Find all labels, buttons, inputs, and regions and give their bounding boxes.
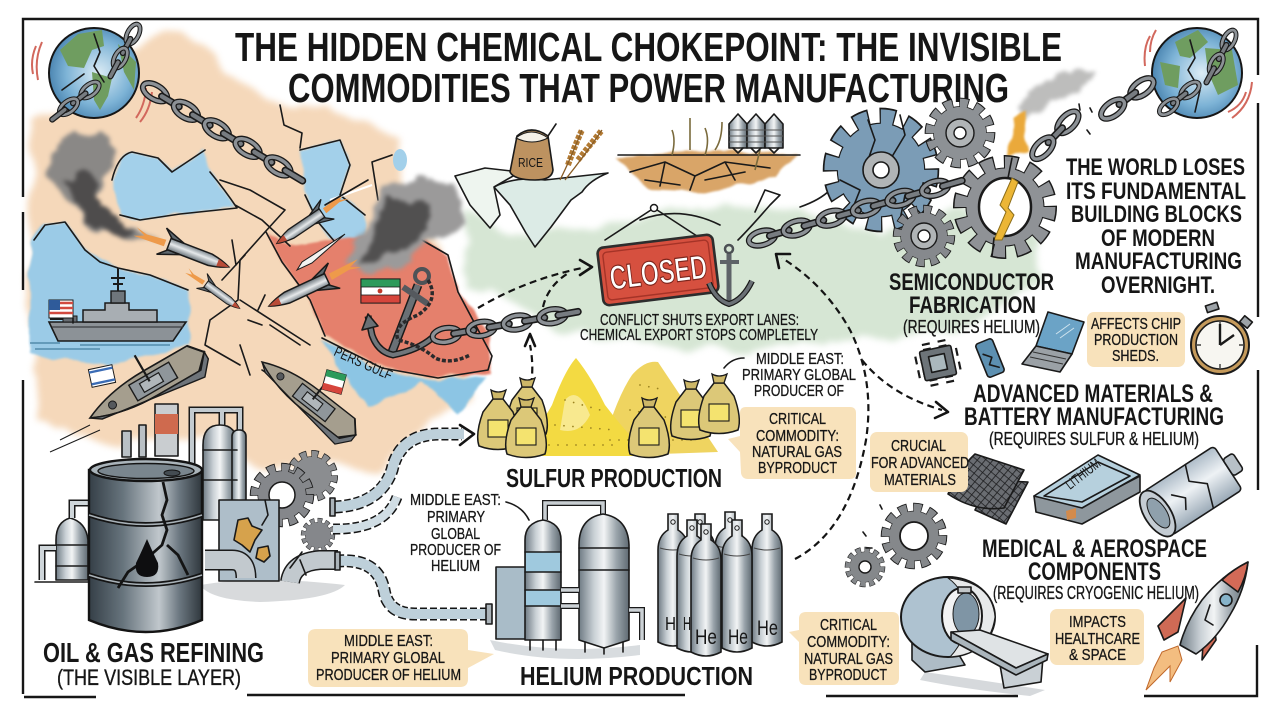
icon: broken gears [255, 454, 334, 550]
callout: primary global producer of helium [308, 629, 494, 687]
callout: helium critical commodity: BYPRODUCT [809, 667, 887, 684]
text: world loses statement: OF MODERN [1101, 225, 1215, 252]
callout: crucial for advanced materials: CRUCIAL [891, 438, 946, 455]
callout: crucial for advanced materials: MATERIALS [884, 472, 956, 489]
icon: sulfur piles [515, 358, 718, 456]
callout: crucial for advanced materials [870, 432, 969, 492]
map: India outline [494, 173, 608, 247]
icon: MRI scanner [901, 577, 1048, 696]
title: THE HIDDEN CHEMICAL CHOKEPOINT: THE INVISIBLE [235, 24, 1062, 70]
icon: rocket [1146, 562, 1248, 690]
callout: sulfur critical commodity [728, 407, 856, 479]
heading: advanced materials: (REQUIRES SULFUR & HELIUM) [989, 429, 1199, 449]
callout: crucial for advanced materials: FOR ADVANCED [871, 455, 969, 472]
note: sulfur producer: PRIMARY GLOBAL [742, 367, 856, 384]
chain: broken chain from right globe [1028, 74, 1157, 163]
heading: semiconductor fabrication: (REQUIRES HELIUM) [903, 317, 1040, 337]
heading: medical and aerospace: MEDICAL & AEROSPACE [982, 535, 1207, 563]
icon: small lower gear [898, 210, 950, 262]
callout: affects chip production: SHEDS. [1112, 348, 1159, 365]
panel: semiconductor fabrication [889, 269, 1252, 389]
callout: impacts healthcare and space: IMPACTS [1069, 614, 1126, 631]
icon: big cracked gear [961, 158, 1049, 256]
icon: Iranian warship [250, 339, 373, 451]
title: COMMODITIES THAT POWER MANUFACTURING [288, 65, 1009, 111]
chain: from left globe to map [140, 79, 309, 188]
icon: closed sign with anchor: CLOSED [607, 248, 709, 298]
callout: primary global producer of helium: PRODUCER OF HELIUM [316, 667, 461, 684]
icon: lithium battery [1034, 455, 1140, 524]
callout: sulfur critical commodity: BYPRODUCT [758, 460, 837, 477]
icon: cracked phone [975, 338, 1005, 378]
icon: small upper gear [930, 103, 990, 163]
callout: helium critical commodity: NATURAL GAS [804, 651, 893, 668]
panel: helium production [308, 492, 899, 691]
icon: microchip [912, 337, 964, 389]
smoke: Iran plume [344, 176, 462, 272]
icon: sulfur bags [478, 374, 739, 458]
icon: cracked oil barrel [89, 459, 202, 632]
icon: parched land with silos [615, 114, 800, 192]
icon: helium cylinders [658, 512, 782, 656]
heading: medical and aerospace: COMPONENTS [1028, 558, 1161, 586]
pipes: refinery to sulfur and helium [330, 425, 492, 624]
map: peach land [30, 32, 470, 468]
label: Persian Gulf: PERS GULF [332, 343, 395, 383]
map: west Asia outline [455, 168, 520, 228]
heading: medical and aerospace [982, 535, 1207, 603]
callout: sulfur critical commodity: CRITICAL [769, 411, 826, 428]
callout: primary global producer of helium: PRIMARY GLOBAL [331, 650, 445, 667]
arrows: dashed flows [478, 254, 948, 559]
note: helium producer: PRODUCER OF [410, 542, 501, 559]
icon: lithium battery: LITHIUM [1062, 455, 1103, 492]
callout: impacts healthcare and space [1050, 609, 1144, 665]
heading: oil and gas refining: (THE VISIBLE LAYER) [57, 665, 241, 690]
icon: anchor and chain [362, 269, 470, 361]
map: pale green Asia [462, 205, 1045, 350]
icon: helium cylinders: He [728, 626, 748, 649]
icon: rice sack and wheat: RICE [518, 155, 543, 170]
note: sulfur producer [724, 351, 856, 400]
heading: helium production: HELIUM PRODUCTION [520, 661, 753, 691]
smoke: left plume [44, 132, 160, 240]
icon: left cracked globe [32, 22, 152, 125]
map: small lake [393, 149, 407, 171]
note: sulfur producer: PRODUCER OF [754, 383, 844, 400]
note: helium producer [410, 492, 529, 575]
panel: advanced materials and battery [848, 380, 1252, 584]
callout: helium critical commodity: COMMODITY: [807, 634, 890, 651]
panel: sulfur production [478, 351, 856, 493]
callout: sulfur critical commodity: NATURAL GAS [752, 444, 842, 461]
heading: sulfur production: SULFUR PRODUCTION [506, 463, 722, 493]
map: Caspian Sea [300, 140, 365, 245]
callout: impacts healthcare and space: HEALTHCARE [1055, 631, 1140, 648]
text: conflict caption [580, 312, 818, 344]
icon: carbon mesh [948, 454, 1028, 524]
chain: Iran to closed sign [431, 304, 582, 344]
text: world loses statement [1066, 154, 1246, 299]
heading: semiconductor fabrication: FABRICATION [909, 292, 1036, 319]
icon: closed sign with anchor [597, 204, 752, 306]
callout: primary global producer of helium: MIDDLE EAST: [344, 633, 433, 650]
icon: Iran flag [361, 279, 400, 303]
icon: helium cylinders: H [683, 614, 691, 634]
icon: helium cylinders: He [757, 617, 778, 640]
callout: affects chip production [1087, 312, 1185, 367]
icon: helium cylinders: H [665, 614, 676, 634]
map: Persian Gulf [320, 340, 488, 414]
note: helium producer: HELIUM [431, 558, 480, 575]
icon: rice sack and wheat [510, 124, 602, 180]
heading: oil and gas refining: OIL & GAS REFINING [43, 637, 264, 668]
panel: oil and gas refining [35, 404, 345, 690]
chain: closed sign to gears [747, 173, 967, 248]
icon: refinery stacks and column [35, 404, 345, 602]
callout: affects chip production: AFFECTS CHIP [1091, 316, 1181, 333]
icon: stopwatch [1191, 302, 1252, 374]
callout: helium critical commodity [789, 612, 899, 685]
icon: helium cylinders: He [695, 626, 717, 649]
heading: medical and aerospace: (REQUIRES CRYOGENIC HELIUM) [993, 583, 1199, 603]
icons: missiles [130, 180, 372, 385]
icon: cracked tube [1133, 440, 1252, 542]
title [235, 24, 1062, 111]
text: conflict caption: CHEMICAL EXPORT STOPS COMPLETELY [580, 327, 818, 344]
heading: semiconductor fabrication [889, 269, 1054, 337]
note: helium producer: MIDDLE EAST: [410, 492, 501, 509]
watercolor map [30, 32, 1045, 468]
note: helium producer: GLOBAL [431, 526, 480, 543]
panel: medical and aerospace [901, 535, 1248, 696]
map: Mediterranean [30, 222, 190, 365]
icon: right cracked globe [1145, 28, 1252, 118]
smoke: gear plume and flame [1006, 72, 1092, 158]
heading: oil and gas refining [43, 637, 264, 690]
icon: laptop [1022, 312, 1084, 372]
map: red Iran [266, 232, 492, 378]
icon: Israeli warship [50, 324, 215, 452]
icon: helium plant [490, 503, 642, 659]
callout: helium critical commodity: CRITICAL [820, 617, 877, 634]
heading: advanced materials: ADVANCED MATERIALS & [973, 380, 1213, 408]
heading: advanced materials [964, 380, 1224, 449]
icon: US warship [30, 268, 186, 349]
callout: impacts healthcare and space: & SPACE [1069, 647, 1126, 664]
text: world loses statement: OVERNIGHT. [1101, 272, 1215, 299]
note: sulfur producer: MIDDLE EAST: [756, 351, 844, 368]
callout: affects chip production: PRODUCTION [1094, 332, 1178, 349]
icon: loose gears [848, 505, 942, 584]
icon: blue cracked gear [832, 115, 930, 223]
heading: semiconductor fabrication: SEMICONDUCTOR [889, 269, 1054, 296]
text: conflict caption: CONFLICT SHUTS EXPORT LANES: [600, 312, 799, 329]
icon: damaged control panel [205, 500, 338, 582]
map: Black Sea [112, 150, 237, 220]
callout: sulfur critical commodity: COMMODITY: [756, 428, 839, 445]
map: borders [34, 105, 392, 365]
map: Russia outline [640, 190, 830, 240]
note: helium producer: PRIMARY [427, 509, 485, 526]
